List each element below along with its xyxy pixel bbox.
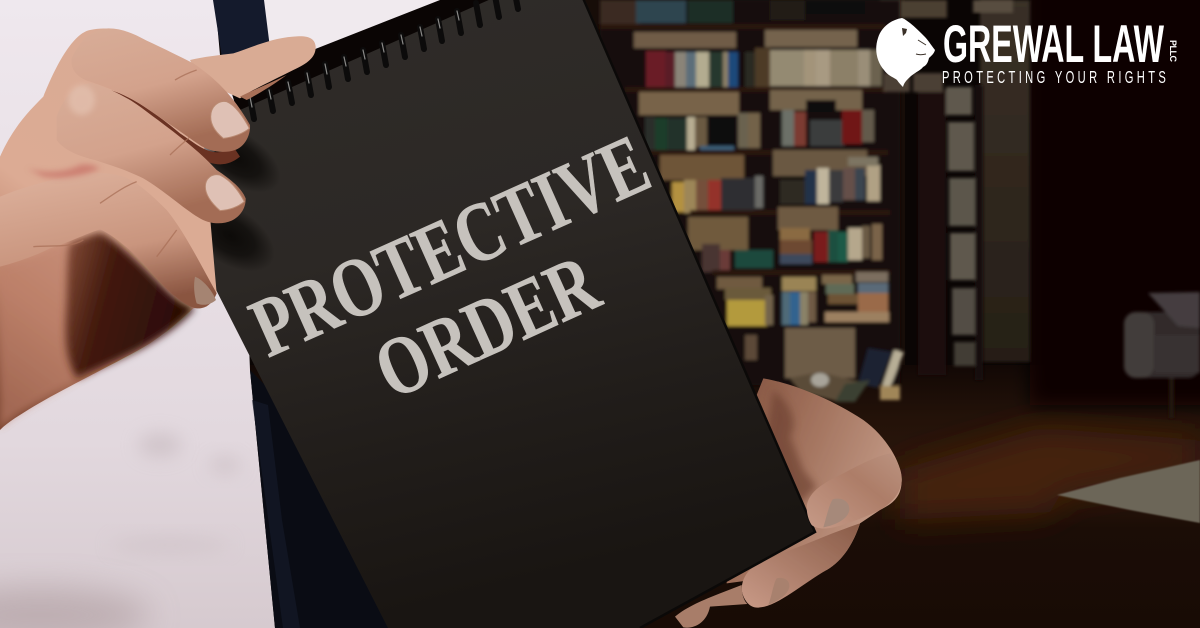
pinky below notebook xyxy=(675,585,747,628)
red crease xyxy=(27,164,100,178)
third shelf row xyxy=(639,90,888,155)
palm xyxy=(0,29,217,430)
knuckle creases xyxy=(33,70,197,257)
icon: lion head xyxy=(876,18,935,87)
sixth shelf row xyxy=(717,272,889,326)
armchair xyxy=(1124,292,1200,418)
notebook right edge xyxy=(583,0,815,628)
notebook cover xyxy=(177,0,815,628)
finger below notebook xyxy=(742,523,860,608)
necktie xyxy=(213,0,400,628)
fourth shelf row xyxy=(660,150,890,215)
PLLC: PLLC xyxy=(1168,40,1178,62)
middle finger xyxy=(57,83,246,223)
tagline: PROTECTING YOUR RIGHTS xyxy=(942,67,1166,88)
fingernail: middle xyxy=(205,175,244,211)
finger shadows on notebook xyxy=(173,109,292,286)
fingernail: ring xyxy=(194,277,216,305)
rug xyxy=(1057,460,1200,523)
fifth shelf row xyxy=(688,207,890,275)
logo: Grewal Law xyxy=(876,15,1178,88)
notebook title xyxy=(238,117,663,417)
index finger xyxy=(71,28,250,152)
shadow between fingers xyxy=(110,90,240,164)
ladder and wall panels xyxy=(883,73,983,380)
lower palm tone xyxy=(0,238,93,428)
word: ORDER: ORDER xyxy=(362,237,613,417)
shirt xyxy=(0,0,440,628)
fingernail: index xyxy=(211,101,249,138)
lower cabinet and fallen books xyxy=(745,328,904,402)
knuckle highlight xyxy=(68,85,95,115)
thumb xyxy=(190,36,316,98)
back of hand xyxy=(727,378,902,583)
finger nail xyxy=(768,578,789,605)
second shelf row xyxy=(625,30,887,92)
right thumb over notebook xyxy=(807,453,902,528)
bookcase xyxy=(600,0,904,402)
left hand xyxy=(0,28,316,430)
top shelf books xyxy=(600,0,885,29)
palm shadow xyxy=(66,233,195,378)
right hand behind notebook xyxy=(675,378,902,628)
thumb nail xyxy=(823,499,849,527)
ring finger xyxy=(0,173,217,308)
word: PROTECTIVE: PROTECTIVE xyxy=(238,117,663,375)
spiral binding xyxy=(250,0,518,119)
